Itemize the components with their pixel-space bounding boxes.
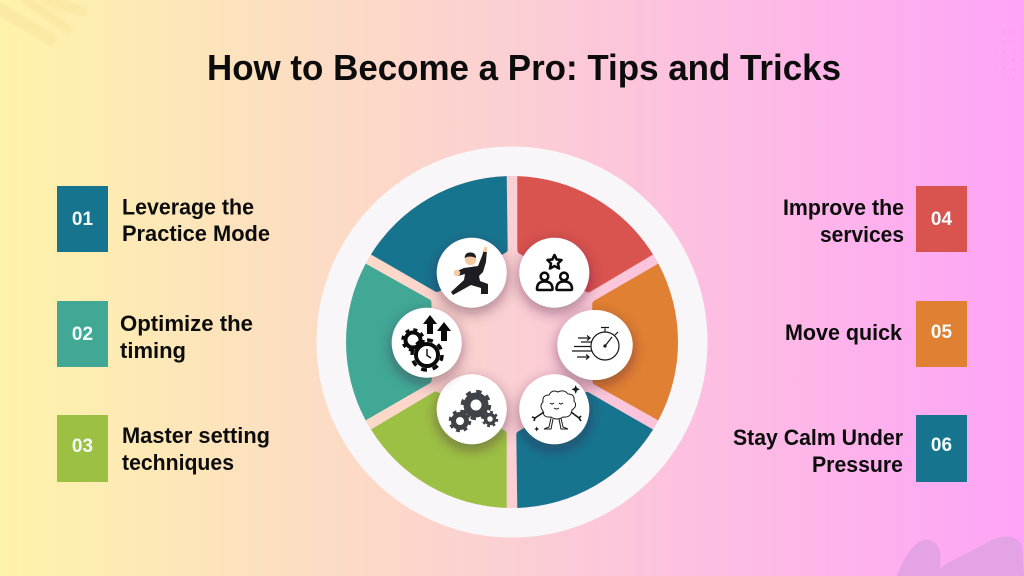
item 01: Leverage the Practice Mode (57, 186, 270, 252)
wheel diagram (298, 137, 726, 547)
decoration: dot grid top right (994, 31, 1023, 79)
number box 02: 02 (72, 324, 93, 345)
number box 04: 04 (931, 209, 952, 230)
icon: team with star (519, 238, 589, 308)
label 05: Move quick (785, 320, 903, 345)
segment 06: blue (484, 371, 653, 547)
icon: martial artist (437, 238, 507, 308)
item 02: Optimize the timing (57, 301, 253, 367)
number box 06 (916, 415, 967, 482)
number box 04 (916, 186, 967, 252)
outer ring (331, 161, 693, 523)
label 03: Master setting (122, 423, 270, 448)
item 04: Improve the services (783, 186, 967, 252)
wheel segments (298, 137, 726, 547)
number box 01: 01 (72, 209, 93, 230)
label 04: Improve the (783, 195, 904, 220)
segment 04: red (517, 176, 653, 292)
label 02 (120, 311, 253, 363)
label 04: services (820, 222, 904, 247)
number box 02 (57, 301, 108, 367)
label 04 (783, 195, 904, 247)
label 01 (122, 194, 270, 246)
icon: stopwatch with speed lines (557, 310, 633, 380)
segment 03: green (371, 392, 507, 508)
label 06 (733, 425, 903, 477)
number box 05 (916, 301, 967, 367)
number box 06: 06 (931, 435, 952, 456)
label 02: Optimize the (120, 311, 253, 336)
item 03: Master setting techniques (57, 415, 270, 482)
number box 05: 05 (931, 322, 952, 343)
segment 05: orange (558, 264, 726, 439)
segment 01: blue (371, 137, 540, 313)
label 03 (122, 423, 270, 475)
segment 02: teal (298, 245, 466, 420)
number box 01 (57, 186, 108, 252)
number box 03: 03 (72, 436, 93, 457)
title: How to Become a Pro: Tips and Tricks (207, 47, 841, 88)
item 05: Move quick (785, 301, 967, 367)
item 06: Stay Calm Under Pressure (733, 415, 967, 482)
decoration: blob bottom right (897, 537, 1024, 576)
label 01: Leverage the (122, 194, 254, 220)
label 06: Stay Calm Under (733, 425, 903, 450)
decoration: brush strokes top left (0, 0, 82, 39)
icon: three gears (437, 374, 507, 444)
number box 03 (57, 415, 108, 482)
icon: calm brain character (519, 374, 589, 444)
icon: gears, clock and up arrows (392, 308, 462, 378)
label 06: Pressure (812, 452, 903, 477)
label 03: techniques (122, 450, 234, 475)
label 02: timing (120, 338, 186, 363)
label 01: Practice Mode (122, 221, 270, 246)
